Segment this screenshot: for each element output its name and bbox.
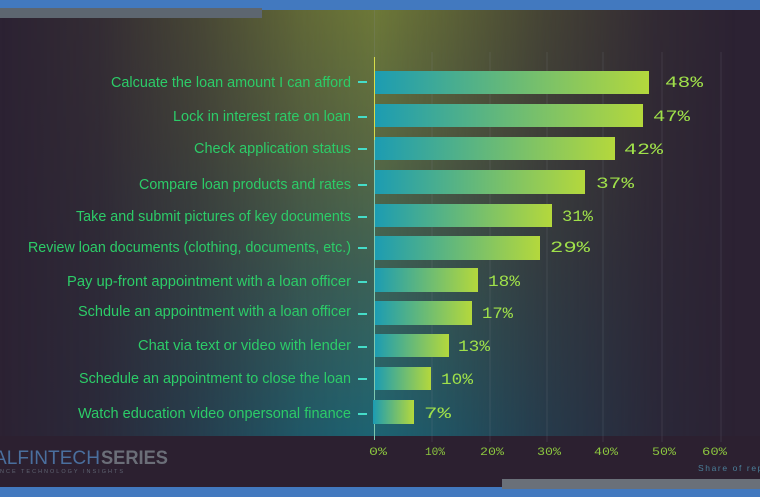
- gridlines: [374, 10, 721, 442]
- x axis labels: 0%: [369, 447, 388, 459]
- bars: [373, 71, 649, 424]
- category labels: [28, 75, 351, 422]
- background glow: [86, 10, 652, 436]
- y axis line: [374, 57, 376, 440]
- logo: SERIES: [101, 448, 168, 469]
- category labels: Compare loan products and rates: [139, 177, 351, 193]
- value labels: 17%: [482, 305, 514, 323]
- top banner: [0, 0, 760, 18]
- category labels: Take and submit pictures of key documents: [76, 209, 351, 225]
- x axis labels: 10%: [425, 447, 445, 459]
- value labels: 18%: [488, 273, 521, 291]
- category labels: Check application status: [194, 141, 351, 157]
- bottom banner: [0, 479, 760, 497]
- value labels: 37%: [596, 175, 635, 193]
- value labels: 31%: [562, 208, 594, 226]
- value labels: 10%: [441, 371, 474, 389]
- category labels: Chat via text or video with lender: [138, 338, 351, 354]
- category labels: Schdule an appointment with a loan officer: [78, 304, 351, 320]
- value labels: 42%: [624, 141, 664, 159]
- x axis labels: 20%: [480, 447, 504, 459]
- x axis labels: 60%: [702, 447, 727, 459]
- value labels: [424, 74, 704, 423]
- value labels: 47%: [653, 108, 691, 126]
- logo: [0, 448, 168, 475]
- category labels: Watch education video onpersonal finance: [78, 406, 351, 422]
- value labels: 48%: [665, 74, 704, 92]
- logo: NCE TECHNOLOGY INSIGHTS: [0, 469, 123, 475]
- category labels: Calcuate the loan amount I can afford: [111, 75, 351, 91]
- x axis labels: 40%: [594, 447, 618, 459]
- category labels: Review loan documents (clothing, documents, etc.): [28, 240, 351, 256]
- category tick marks: [358, 81, 367, 415]
- category labels: Pay up-front appointment with a loan officer: [67, 274, 351, 290]
- value labels: 29%: [550, 239, 591, 257]
- category labels: Schedule an appointment to close the loan: [79, 371, 351, 387]
- value labels: 7%: [424, 405, 452, 423]
- x axis labels: [369, 447, 727, 459]
- x axis labels: 50%: [652, 447, 676, 459]
- category labels: Lock in interest rate on loan: [173, 109, 351, 125]
- value labels: 13%: [458, 338, 491, 356]
- x axis labels: 30%: [537, 447, 561, 459]
